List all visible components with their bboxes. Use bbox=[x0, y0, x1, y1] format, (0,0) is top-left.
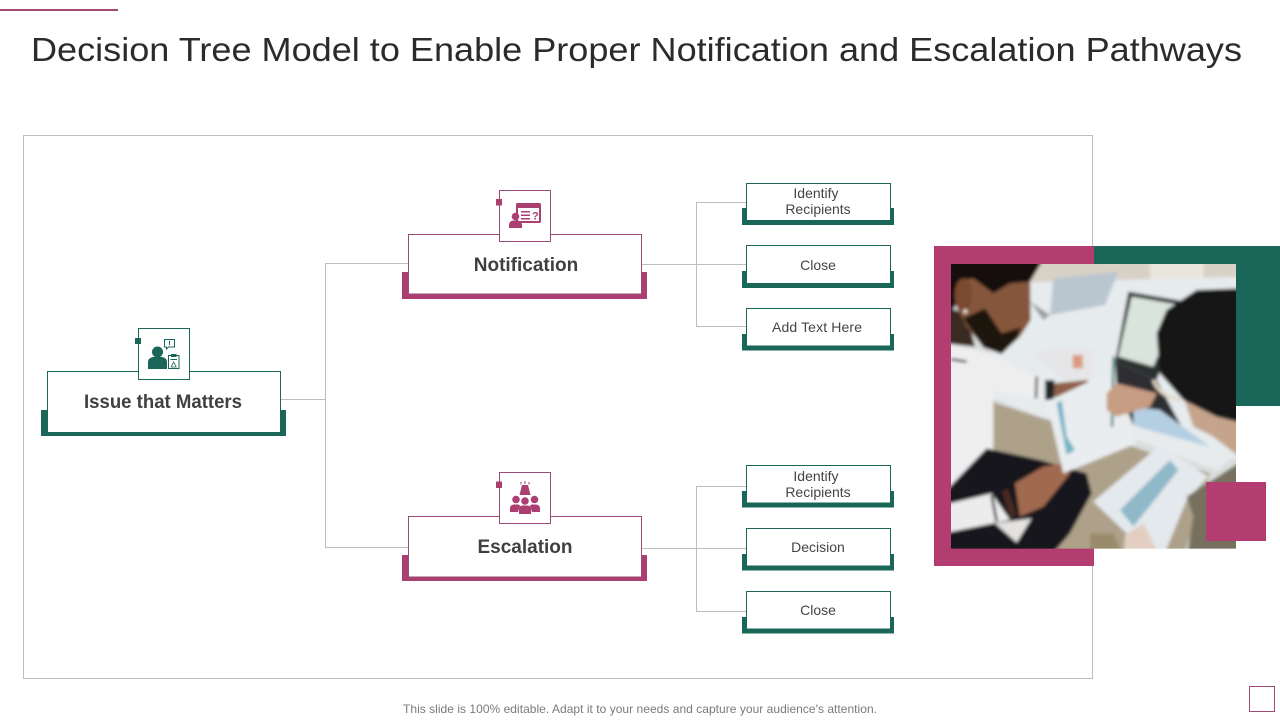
outcome: Close (escalation) bbox=[742, 592, 894, 634]
outcome: Identify Recipients: Recipients bbox=[785, 201, 851, 217]
glasses bbox=[1153, 380, 1180, 400]
woman's hand bbox=[1107, 383, 1157, 417]
floor bottom bbox=[1089, 532, 1120, 548]
decorative block: pink frame bbox=[934, 246, 1094, 566]
background laptop bbox=[1050, 272, 1118, 315]
connector: escalation to outcomes bbox=[642, 486, 746, 612]
outcome: Add Text Here bbox=[742, 308, 894, 350]
icon: person with question window bbox=[509, 203, 541, 228]
node: Notification bbox=[402, 190, 647, 299]
foreground laptop bbox=[1115, 292, 1187, 380]
man shirt bbox=[951, 344, 996, 490]
photo: two people reviewing charts bbox=[943, 257, 1243, 557]
outcome: Identify Recipients (escalation) bbox=[742, 466, 894, 508]
panel: decision tree frame bbox=[24, 136, 1092, 678]
icon: person with alert and clipboard bbox=[148, 340, 179, 369]
outcome: Identify Recipients bbox=[742, 184, 894, 225]
woman's neck bbox=[1184, 398, 1236, 456]
decorative block: pink square bbox=[1206, 482, 1266, 541]
node: Issue that Matters: Issue that Matters bbox=[84, 392, 242, 413]
outcome: Identify Recipients (escalation): Identify bbox=[793, 468, 839, 484]
man sleeve bbox=[943, 493, 1010, 533]
outcome: Close: Close bbox=[800, 257, 836, 273]
icon: person with question window: ? bbox=[532, 210, 539, 222]
outcome: Identify Recipients (escalation): Recipients bbox=[785, 484, 851, 500]
table chart paper bbox=[1033, 347, 1093, 380]
outcome: Decision bbox=[742, 528, 894, 570]
node: Issue that Matters bbox=[41, 328, 286, 436]
decorative block: green bbox=[1092, 246, 1280, 406]
top accent line bbox=[0, 9, 118, 11]
outcome: Close bbox=[742, 246, 894, 288]
table bbox=[990, 277, 1243, 460]
outcome: Decision: Decision bbox=[791, 539, 845, 555]
corner marker bbox=[1250, 686, 1274, 712]
floor bbox=[992, 401, 1211, 549]
node: Escalation bbox=[402, 472, 647, 581]
node: Escalation: Escalation bbox=[477, 537, 573, 558]
second paper bbox=[1093, 445, 1208, 557]
held paper bbox=[1047, 373, 1137, 473]
icon: group with alert bag bbox=[510, 481, 540, 514]
man pants bbox=[943, 448, 1092, 557]
node: Notification: Notification bbox=[474, 255, 578, 276]
footer note: This slide is 100% editable. Adapt it to your needs and capture your audience's attention. bbox=[403, 702, 877, 716]
woman's sleeve and hand bbox=[1185, 462, 1236, 549]
man head bbox=[951, 307, 976, 348]
outcome: Add Text Here: Add Text Here bbox=[772, 319, 862, 335]
connector: issue to branches bbox=[281, 264, 408, 548]
woman's hair bbox=[1157, 288, 1243, 423]
outcome: Close (escalation): Close bbox=[800, 602, 836, 618]
woman's pencil bbox=[1112, 357, 1114, 427]
connector: notification to outcomes bbox=[642, 202, 746, 326]
outcome: Identify Recipients: Identify bbox=[793, 185, 839, 201]
title: Decision Tree Model to Enable Proper Notification and Escalation Pathways bbox=[31, 32, 1242, 69]
man hands bbox=[1053, 380, 1095, 398]
wall / background bbox=[1027, 264, 1236, 282]
